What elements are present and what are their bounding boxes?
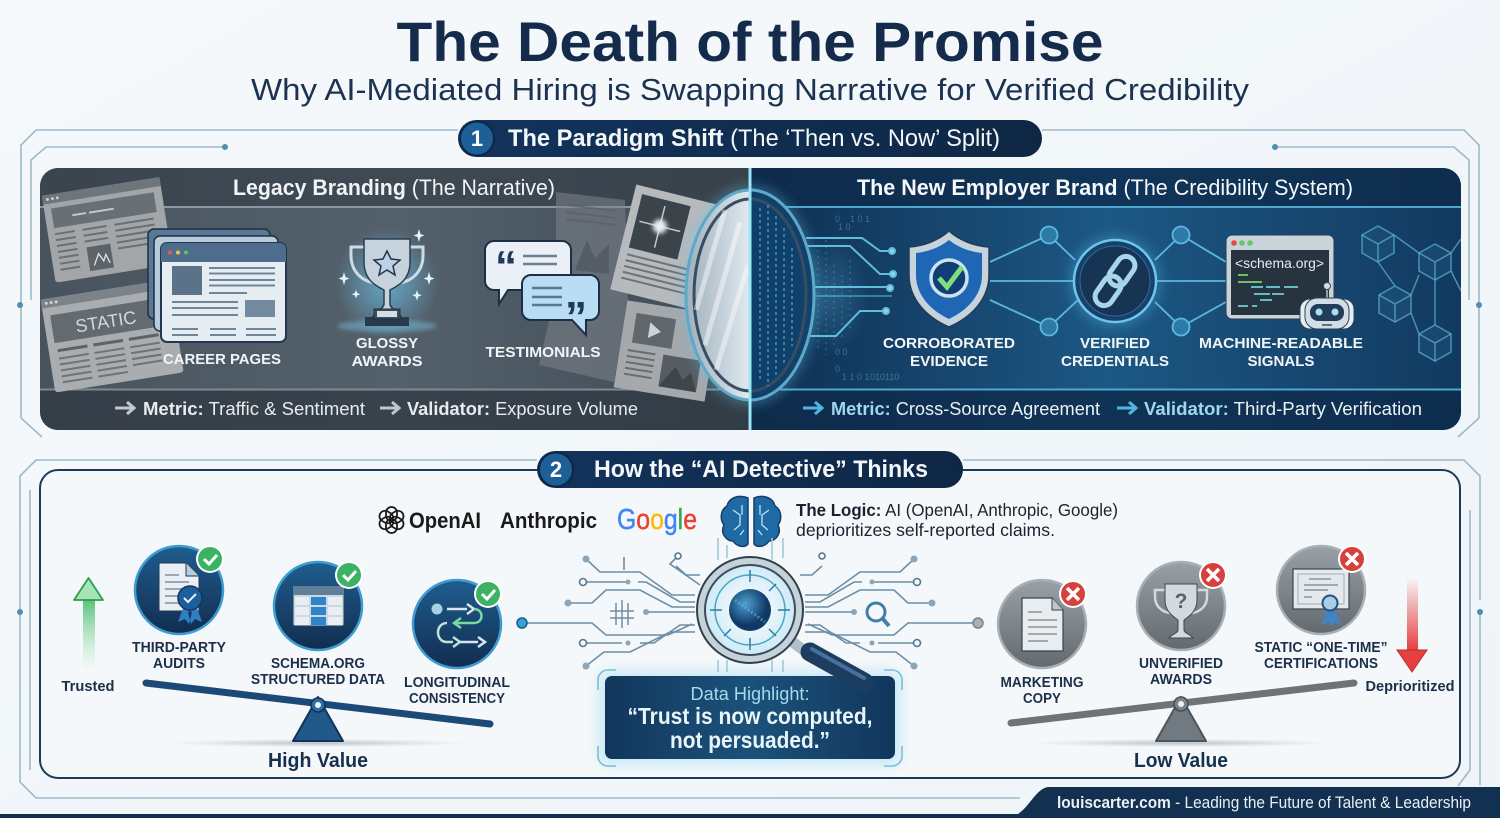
panel: AI detective — [40, 451, 1460, 778]
icon: testimonial bubbles: ” — [565, 293, 587, 342]
binary code texture: 1 0 1 — [850, 214, 870, 224]
logo: OpenAI: OpenAI — [409, 508, 481, 533]
text: the logic: deprioritizes self-reported claims. — [796, 520, 1055, 540]
icon: small chip — [610, 600, 634, 628]
icon: testimonial bubbles — [485, 241, 599, 342]
icon: low value scale — [1011, 683, 1354, 747]
metric strip: legacy: Validator: Exposure Volume — [407, 398, 638, 419]
badge: check — [196, 545, 224, 573]
label: verified credentials: VERIFIED — [1080, 335, 1150, 352]
label: glossy awards: GLOSSY — [356, 335, 418, 352]
title: The Death of the Promise — [396, 10, 1104, 73]
badge: cross — [1059, 580, 1087, 608]
icon: testimonial bubbles: “ — [495, 242, 517, 291]
metric strip: legacy: Metric: Traffic & Sentiment — [143, 398, 365, 419]
icon: trusted arrow — [74, 578, 103, 671]
label: verified credentials: CREDENTIALS — [1061, 353, 1169, 370]
label: high value: High Value — [268, 750, 368, 772]
panel: legacy branding background — [40, 168, 750, 430]
label: schema.org structured data: STRUCTURED DATA — [251, 672, 385, 688]
icon: schema window with robot — [1226, 235, 1354, 329]
low value group — [998, 545, 1454, 772]
section 1 heading pill: The Paradigm Shift (The ‘Then vs. Now’ Split) — [508, 125, 1000, 152]
section 1 heading pill — [458, 120, 1042, 157]
section 2 heading pill — [537, 451, 963, 488]
icon: longitudinal consistency — [413, 580, 501, 668]
section 2 heading pill: How the “AI Detective” Thinks — [594, 456, 928, 483]
icon: deprioritized arrow — [1397, 577, 1427, 672]
label: third-party audits — [132, 640, 226, 672]
node: right connector — [973, 618, 983, 628]
binary code texture — [835, 214, 899, 382]
label: corroborated evidence: CORROBORATED — [883, 335, 1015, 352]
callout: data highlight: “Trust is now computed, — [628, 703, 872, 729]
label: third-party audits: THIRD-PARTY — [132, 640, 226, 656]
icon: schema window with robot: <schema.org> — [1235, 255, 1324, 271]
center divider — [748, 168, 752, 430]
binary code texture: 0 — [835, 214, 840, 224]
binary code texture: 0 — [835, 364, 840, 374]
label: static one-time certifications — [1254, 640, 1388, 672]
panel: new employer brand background — [750, 168, 1461, 430]
badge: cross — [1338, 545, 1366, 573]
icon: shield — [909, 231, 989, 327]
callout: data highlight — [598, 670, 902, 766]
legacy static web pages — [41, 177, 184, 393]
label: unverified awards — [1139, 656, 1223, 688]
label: marketing copy — [1000, 675, 1084, 707]
label: longitudinal consistency: CONSISTENCY — [409, 691, 505, 707]
section 2 heading pill: 2 — [550, 457, 562, 482]
logo: OpenAI — [377, 507, 481, 533]
logo: Google: Google — [617, 504, 697, 536]
label: static one-time certifications: CERTIFICATIONS — [1264, 656, 1378, 672]
label: machine-readable signals: MACHINE-READABLE — [1199, 335, 1363, 352]
footer bar — [0, 787, 1500, 818]
metric strip: credibility — [803, 401, 1421, 419]
icon: small magnifier — [867, 603, 889, 626]
mirror — [682, 185, 818, 405]
icon: schema.org structured data — [274, 562, 362, 650]
circuit traces behind mirror — [806, 238, 896, 336]
label: schema.org structured data: SCHEMA.ORG — [271, 656, 365, 672]
icon: brain — [721, 496, 781, 546]
callout: data highlight: not persuaded.” — [670, 727, 830, 753]
node: left connector — [517, 618, 527, 628]
label: marketing copy: MARKETING — [1000, 675, 1084, 691]
icon: static certifications — [1277, 546, 1365, 634]
logo: Anthropic: Anthropic — [500, 508, 597, 533]
icon: marketing copy — [998, 580, 1086, 668]
label: marketing copy: COPY — [1023, 691, 1061, 707]
metric strip: credibility: Validator: Third-Party Verification — [1144, 398, 1422, 419]
label: corroborated evidence — [884, 338, 1014, 366]
label: glossy awards: AWARDS — [352, 353, 422, 370]
text: the logic: The Logic: AI (OpenAI, Anthropic, Google) — [796, 500, 1118, 520]
hexagon network — [1362, 226, 1461, 361]
binary code texture: 010110 — [870, 372, 899, 382]
icon: glossy award trophy — [335, 228, 439, 338]
subtitle: Why AI-Mediated Hiring is Swapping Narrative for Verified Credibility — [251, 72, 1250, 107]
label: machine-readable signals: SIGNALS — [1248, 353, 1314, 370]
panel: paradigm shift — [40, 168, 1461, 430]
label: low value: Low Value — [1134, 750, 1228, 772]
legacy magazines — [539, 184, 719, 402]
label: corroborated evidence: EVIDENCE — [910, 353, 988, 370]
metric strip: credibility: Metric: Cross-Source Agreement — [831, 398, 1100, 419]
text: the logic — [796, 500, 1118, 540]
label: longitudinal consistency — [404, 675, 510, 707]
label: deprioritized: Deprioritized — [1366, 679, 1454, 695]
network connectors — [990, 226, 1226, 336]
icon: unverified awards — [1137, 562, 1225, 650]
callout: data highlight: Data Highlight: — [690, 684, 810, 704]
label: unverified awards: AWARDS — [1150, 672, 1212, 688]
badge: check — [335, 561, 363, 589]
icon: high value scale — [146, 683, 490, 747]
heading: legacy branding: Legacy Branding (The Narrative) — [233, 175, 555, 200]
badge: cross — [1199, 561, 1227, 589]
badge: check — [474, 580, 502, 608]
icon: unverified awards: ? — [1175, 590, 1187, 613]
icon: career pages — [148, 229, 286, 342]
high value group — [62, 545, 510, 772]
label: longitudinal consistency: LONGITUDINAL — [404, 675, 510, 691]
label: glossy awards — [352, 338, 422, 366]
label: verified credentials — [1062, 338, 1168, 366]
metric strip: legacy — [115, 401, 638, 419]
circuit lines — [522, 538, 978, 672]
label: unverified awards: UNVERIFIED — [1139, 656, 1223, 672]
binary code texture: 1 0 — [838, 222, 851, 232]
binary code texture: 0 0 — [835, 347, 848, 357]
label: third-party audits: AUDITS — [153, 656, 205, 672]
heading: new employer brand: The New Employer Brand (The Credibility System) — [857, 175, 1353, 200]
legacy static web pages: STATIC — [74, 307, 138, 336]
label: machine-readable signals — [1200, 338, 1362, 366]
icon: magnifying glass — [697, 557, 864, 682]
section 1 heading pill: 1 — [471, 126, 483, 151]
label: career pages: CAREER PAGES — [163, 351, 281, 368]
icon: chain link — [1069, 235, 1161, 327]
label: static one-time certifications: STATIC “ONE-TIME” — [1254, 640, 1388, 656]
icon: third-party audits — [135, 546, 223, 634]
label: schema.org structured data — [251, 656, 385, 688]
binary rain — [818, 240, 850, 355]
label: trusted: Trusted — [62, 679, 114, 695]
binary code texture: 1 1 0 1 — [842, 372, 870, 382]
label: testimonials: TESTIMONIALS — [486, 344, 600, 361]
footer bar: louiscarter.com - Leading the Future of Talent & Leadership — [1057, 794, 1471, 812]
